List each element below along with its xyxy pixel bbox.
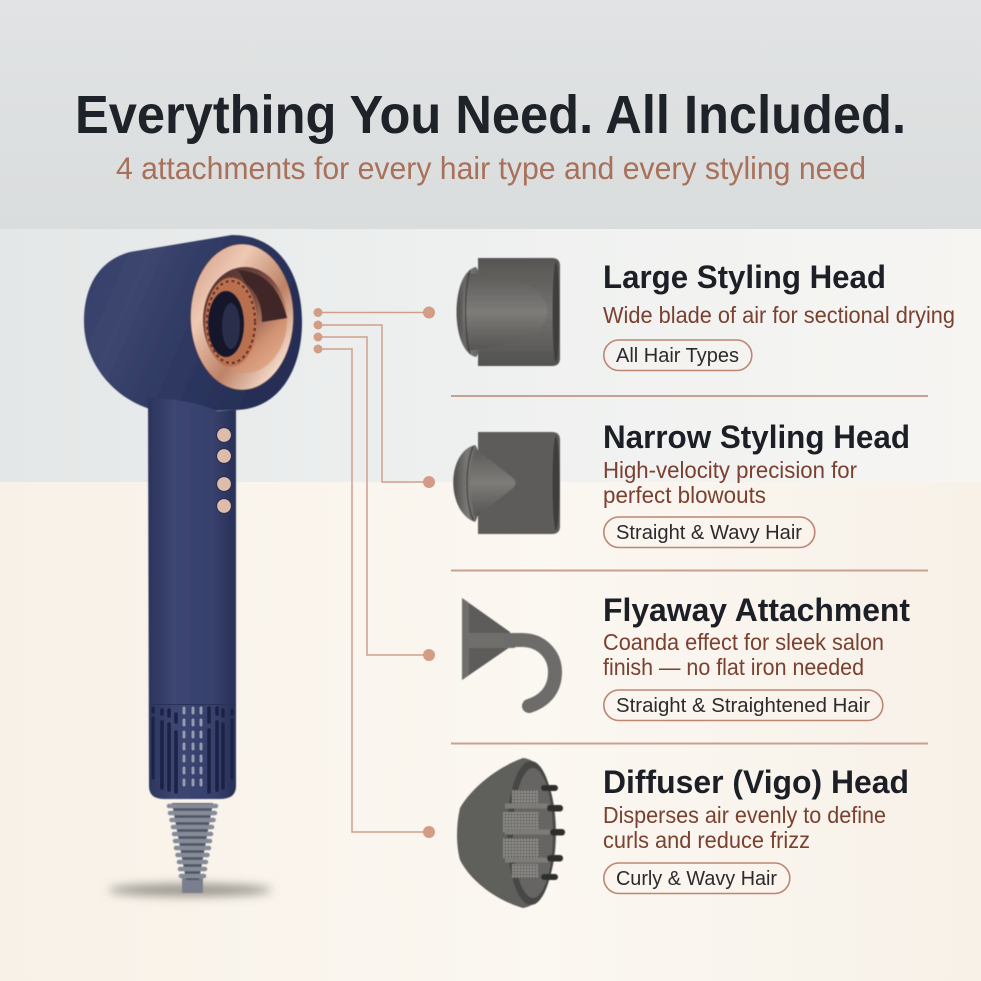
connector lines [314,306,435,838]
panel: narrow styling head: perfect blowouts [603,482,766,508]
handle [148,398,236,799]
inner cup [203,267,287,373]
hair dryer [84,235,302,896]
panel: narrow styling head [603,419,910,548]
inner ring [205,278,257,366]
heading: Large Styling Head [603,259,886,295]
panel: diffuser head [603,764,909,894]
description: High-velocity precision for [603,457,857,483]
floor shadow [108,884,272,896]
panel: flyaway attachment: finish — no flat iron needed [603,654,864,680]
icon: narrow styling head [453,432,560,534]
tag [604,340,752,370]
control buttons [216,428,232,514]
tag: All Hair Types [616,345,739,367]
barrel body [84,235,302,411]
tag: Straight & Straightened Hair [616,695,870,717]
heading: Narrow Styling Head [603,419,910,455]
description: Coanda effect for sleek salon [603,629,884,655]
vent grille [150,704,235,792]
tag: Straight & Wavy Hair [616,522,802,544]
air outlet [208,291,244,357]
panel: large styling head [603,259,955,370]
heading: Flyaway Attachment [603,592,910,628]
icon: diffuser head [457,758,565,908]
title: Everything You Need. All Included. [75,85,906,145]
subtitle: 4 attachments for every hair type and every styling need [116,150,866,186]
description: Wide blade of air for sectional drying [603,302,955,328]
power cord [169,803,216,893]
panel: flyaway attachment [603,592,910,720]
heading: Diffuser (Vigo) Head [603,764,909,800]
description: Disperses air evenly to define [603,802,886,828]
icon: large styling head [456,258,560,366]
rose gold ring [190,244,294,390]
panel: diffuser head: curls and reduce frizz [603,827,810,853]
icon: flyaway attachment [462,598,555,706]
tag [604,863,790,894]
tag: Curly & Wavy Hair [616,868,777,890]
tag [604,690,883,720]
tag [604,517,815,548]
